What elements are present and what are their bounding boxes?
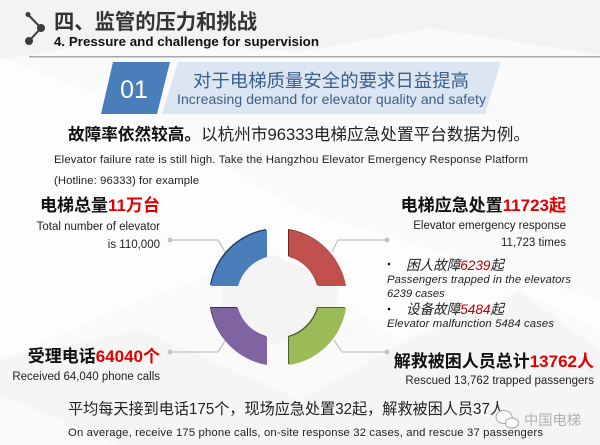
title: 4. Pressure and challenge for supervision (54, 35, 319, 49)
banner heading: 对于电梯质量安全的要求日益提高 (193, 71, 469, 91)
stat: rescued passengers (394, 351, 594, 387)
list: response breakdown: Elevator malfunction 5484 cases (387, 318, 554, 330)
stat: total elevators: is 110,000 (108, 239, 160, 251)
stat: phone calls: 受理电话64040个 (28, 347, 160, 366)
stat: total elevators (37, 195, 160, 251)
stat: rescued passengers: 解救被困人员总计13762人 (394, 351, 594, 371)
list: response breakdown: 困人故障6239起 (406, 257, 506, 273)
intro text: (Hotline: 96333) for example (54, 175, 199, 187)
title: 四、监管的压力和挑战 (54, 11, 257, 34)
segment: green (288, 307, 346, 365)
banner background (162, 62, 501, 114)
header icon: connected nodes (25, 12, 45, 45)
intro text: 故障率依然较高。以杭州市96333电梯应急处置平台数据为例。 (68, 124, 530, 144)
stat: emergency response (401, 195, 566, 249)
segment: red (288, 229, 346, 286)
connector lines (170, 240, 387, 352)
stat: rescued passengers: Rescued 13,762 trapped passengers (405, 375, 594, 387)
list: response breakdown: 设备故障5484起 (406, 301, 506, 317)
badge 01: 01 (120, 76, 148, 104)
list: response breakdown (387, 257, 571, 330)
daily average summary: 平均每天接到电话175个，现场应急处置32起，解救被困人员37人 (68, 399, 505, 418)
section banner (101, 62, 501, 114)
badge 01 (101, 62, 170, 114)
ring chart (210, 229, 346, 365)
intro text: Elevator failure rate is still high. Take the Hangzhou Elevator Emergency Response Platform (54, 154, 528, 166)
segment: purple (210, 307, 267, 365)
stat: phone calls: Received 64,040 phone calls (12, 371, 160, 383)
list: response breakdown: Passengers trapped in the elevators (387, 274, 571, 286)
segment: blue (210, 229, 267, 286)
stat: emergency response: 11,723 times (501, 237, 566, 249)
watermark (496, 410, 581, 428)
watermark: 中国电梯 (524, 412, 581, 428)
title (54, 11, 319, 49)
stat: emergency response: Elevator emergency response (413, 220, 566, 232)
list: response breakdown: 6239 cases (387, 288, 445, 300)
daily average summary: On average, receive 175 phone calls, on-site response 32 cases, and rescue 37 passengers (68, 427, 543, 439)
stat: total elevators: 电梯总量11万台 (40, 195, 160, 215)
banner subheading: Increasing demand for elevator quality and safety (177, 91, 486, 107)
stat: emergency response: 电梯应急处置11723起 (401, 195, 566, 215)
stat: phone calls (12, 347, 160, 383)
daily average summary (68, 399, 543, 439)
stat: total elevators: Total number of elevator (37, 221, 160, 233)
intro text (54, 124, 530, 187)
